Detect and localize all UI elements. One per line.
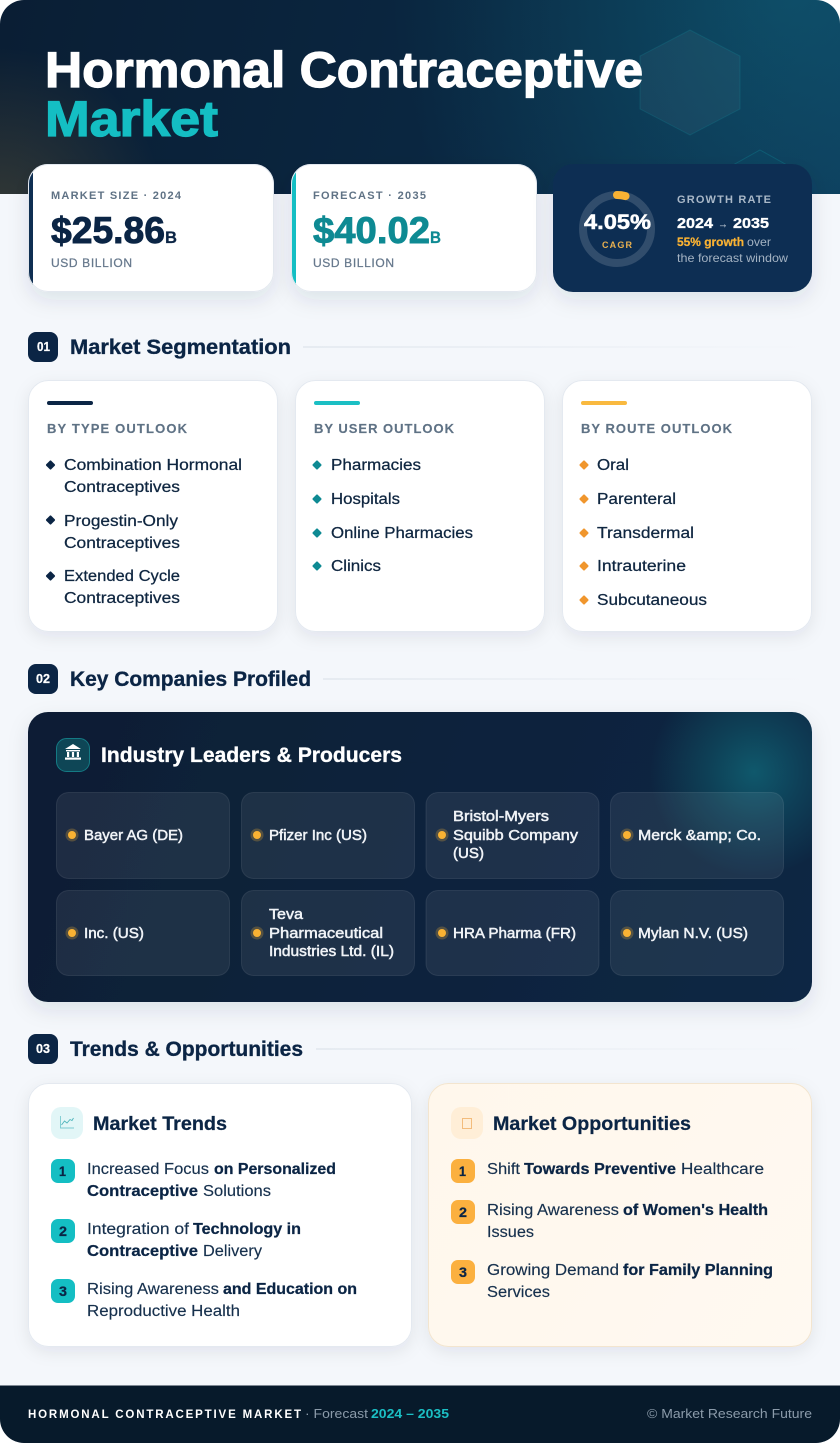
opportunity 3: Growing Demand xyxy=(487,1262,619,1279)
panel: by type outlook: Progestin-Only xyxy=(64,513,178,530)
panel: by user outlook: Clinics xyxy=(331,558,381,575)
company tile: Merck: Merck &amp; Co. xyxy=(638,828,761,844)
panel: by user outlook xyxy=(296,380,544,632)
opportunity 2: Rising Awareness xyxy=(487,1202,619,1219)
stat card: market size: USD BILLION xyxy=(51,256,132,270)
company tile: Pfizer xyxy=(242,792,414,878)
section heading 03: 03 xyxy=(36,1041,50,1056)
icon: line chart xyxy=(51,1107,83,1139)
panel: by route outlook: Subcutaneous xyxy=(597,592,707,609)
growth rate text: over xyxy=(747,235,771,249)
panel: by user outlook: Hospitals xyxy=(331,491,400,508)
trend 2: Integration of xyxy=(87,1221,190,1238)
opportunity 3: for Family Planning xyxy=(623,1262,773,1279)
stat card: market size: MARKET SIZE · 2024 xyxy=(51,190,182,202)
footer xyxy=(0,1386,840,1443)
title: Hormonal Contraceptive xyxy=(45,41,643,98)
panel: by user outlook: BY USER OUTLOOK xyxy=(314,421,455,436)
section heading 03 xyxy=(28,1034,812,1064)
trend 2: Technology in xyxy=(193,1221,301,1238)
icon: small hexagon xyxy=(733,150,787,194)
icon: bank building xyxy=(56,738,90,772)
section heading 01 xyxy=(28,332,812,362)
section heading 02: Key Companies Profiled xyxy=(70,667,311,691)
panel: market trends: Market Trends xyxy=(93,1113,227,1135)
panel: market opportunities xyxy=(428,1084,812,1346)
growth rate text: 2024 xyxy=(677,215,714,232)
panel: by route outlook: Intrauterine xyxy=(597,558,686,575)
opportunity 1: Shift xyxy=(487,1161,521,1178)
icon: missing glyph box xyxy=(451,1107,483,1139)
footer: 2024 – 2035 xyxy=(371,1407,449,1421)
trend 2: Delivery xyxy=(203,1243,262,1260)
company tile: Teva xyxy=(242,890,414,976)
icon: large hexagon xyxy=(640,30,740,135)
stat card: forecast: $40.02 xyxy=(313,210,430,251)
section heading 02: 02 xyxy=(36,671,50,686)
opportunity 1: Towards Preventive xyxy=(524,1161,676,1178)
company tile: Mylan: Mylan N.V. (US) xyxy=(638,926,748,942)
growth rate text: 55% growth xyxy=(677,235,744,249)
stat card: market size: $25.86 xyxy=(51,210,165,251)
panel: by user outlook: Pharmacies xyxy=(331,457,421,474)
company tile: Pfizer: Pfizer Inc (US) xyxy=(269,828,367,844)
trend 3: 3 xyxy=(59,1284,68,1299)
opportunity 2: of Women's Health xyxy=(623,1202,768,1219)
panel: market opportunities: Market Opportunities xyxy=(493,1113,691,1135)
opportunity 2: 2 xyxy=(459,1205,467,1220)
panel: by route outlook: Transdermal xyxy=(597,525,694,542)
panel: by route outlook: Oral xyxy=(597,457,629,474)
panel: industry leaders: Industry Leaders & Producers xyxy=(101,743,402,767)
opportunity 2: Issues xyxy=(487,1224,534,1241)
panel: by type outlook: Contraceptives xyxy=(64,535,180,552)
title xyxy=(45,41,643,147)
company tile: Inc.: Inc. (US) xyxy=(84,926,144,942)
trend 3: Rising Awareness xyxy=(87,1281,219,1298)
company tile: Mylan xyxy=(610,890,784,976)
stat card: market size: B xyxy=(165,229,177,247)
trend 1: 1 xyxy=(59,1164,66,1179)
stat card: forecast xyxy=(291,164,537,292)
footer: © Market Research Future xyxy=(647,1407,812,1421)
panel: by type outlook: Contraceptives xyxy=(64,590,180,607)
company tile: Merck xyxy=(610,792,784,878)
company tile: Teva: Industries Ltd. (IL) xyxy=(269,944,394,960)
title: Market xyxy=(45,90,218,147)
opportunity 1 xyxy=(451,1159,764,1183)
trend 1: Contraceptive xyxy=(87,1183,198,1200)
opportunity 1: 1 xyxy=(459,1164,466,1179)
panel: by user outlook: Online Pharmacies xyxy=(331,525,473,542)
footer: HORMONAL CONTRACEPTIVE MARKET xyxy=(28,1409,301,1421)
company tile: Bristol-Myers: (US) xyxy=(453,846,484,862)
panel: by type outlook: Extended Cycle xyxy=(64,568,180,585)
trend 3: and Education on xyxy=(223,1281,357,1298)
trend 2: 2 xyxy=(59,1224,67,1239)
trend 1: on Personalized xyxy=(214,1161,336,1178)
panel: by type outlook: Contraceptives xyxy=(64,479,180,496)
stat card: forecast: FORECAST · 2035 xyxy=(313,190,426,202)
trend 1: Increased Focus xyxy=(87,1161,209,1178)
company tile: Bayer xyxy=(56,792,230,878)
panel: by type outlook xyxy=(28,380,278,632)
opportunity 2 xyxy=(451,1200,768,1241)
trend 1 xyxy=(51,1159,336,1200)
trend 1: Solutions xyxy=(203,1183,271,1200)
panel: market trends xyxy=(28,1084,412,1346)
chart: CAGR ring xyxy=(583,195,651,263)
trend 3 xyxy=(51,1279,357,1320)
header banner xyxy=(0,0,840,194)
opportunity 3: 3 xyxy=(459,1265,468,1280)
growth rate text: the forecast window xyxy=(677,251,788,265)
chart: CAGR ring: CAGR xyxy=(602,240,632,250)
growth rate text: GROWTH RATE xyxy=(677,194,771,206)
opportunity 1: Healthcare xyxy=(681,1161,764,1178)
panel: by route outlook: BY ROUTE OUTLOOK xyxy=(581,421,733,436)
company tile: Teva: Pharmaceutical xyxy=(269,926,383,942)
section heading 02 xyxy=(28,664,812,694)
company tile: Inc. xyxy=(56,890,230,976)
chart: CAGR ring: 4.05% xyxy=(584,211,651,234)
company tile: HRA Pharma xyxy=(426,890,599,976)
panel: by route outlook: Parenteral xyxy=(597,491,676,508)
footer: · Forecast xyxy=(305,1407,369,1421)
company tile: HRA Pharma: HRA Pharma (FR) xyxy=(453,926,576,942)
trend 2: Contraceptive xyxy=(87,1243,198,1260)
company tile: Bristol-Myers: Squibb Company xyxy=(453,828,579,844)
panel: by type outlook: BY TYPE OUTLOOK xyxy=(47,421,188,436)
company tile: Bayer: Bayer AG (DE) xyxy=(84,828,183,844)
stat card: growth rate xyxy=(553,164,812,292)
section heading 03: Trends & Opportunities xyxy=(70,1037,303,1061)
stat card: forecast: B xyxy=(430,229,441,247)
opportunity 3: Services xyxy=(487,1284,550,1301)
section heading 01: Market Segmentation xyxy=(70,335,291,359)
company tile: Bristol-Myers: Bristol-Myers xyxy=(453,809,549,825)
stat card: forecast: USD BILLION xyxy=(313,256,394,270)
growth rate text: 2035 xyxy=(733,215,769,232)
stat card: market size xyxy=(28,164,274,292)
growth rate text: → xyxy=(718,216,728,231)
panel: by route outlook xyxy=(562,380,812,632)
company tile: Teva: Teva xyxy=(269,907,304,923)
panel: by type outlook: Combination Hormonal xyxy=(64,457,242,474)
trend 3: Reproductive Health xyxy=(87,1303,240,1320)
panel: industry leaders xyxy=(28,712,812,1002)
company tile: Bristol-Myers xyxy=(426,792,599,878)
growth rate text xyxy=(677,194,788,265)
section heading 01: 01 xyxy=(37,339,50,354)
trend 2 xyxy=(51,1219,301,1260)
opportunity 3 xyxy=(451,1260,773,1301)
